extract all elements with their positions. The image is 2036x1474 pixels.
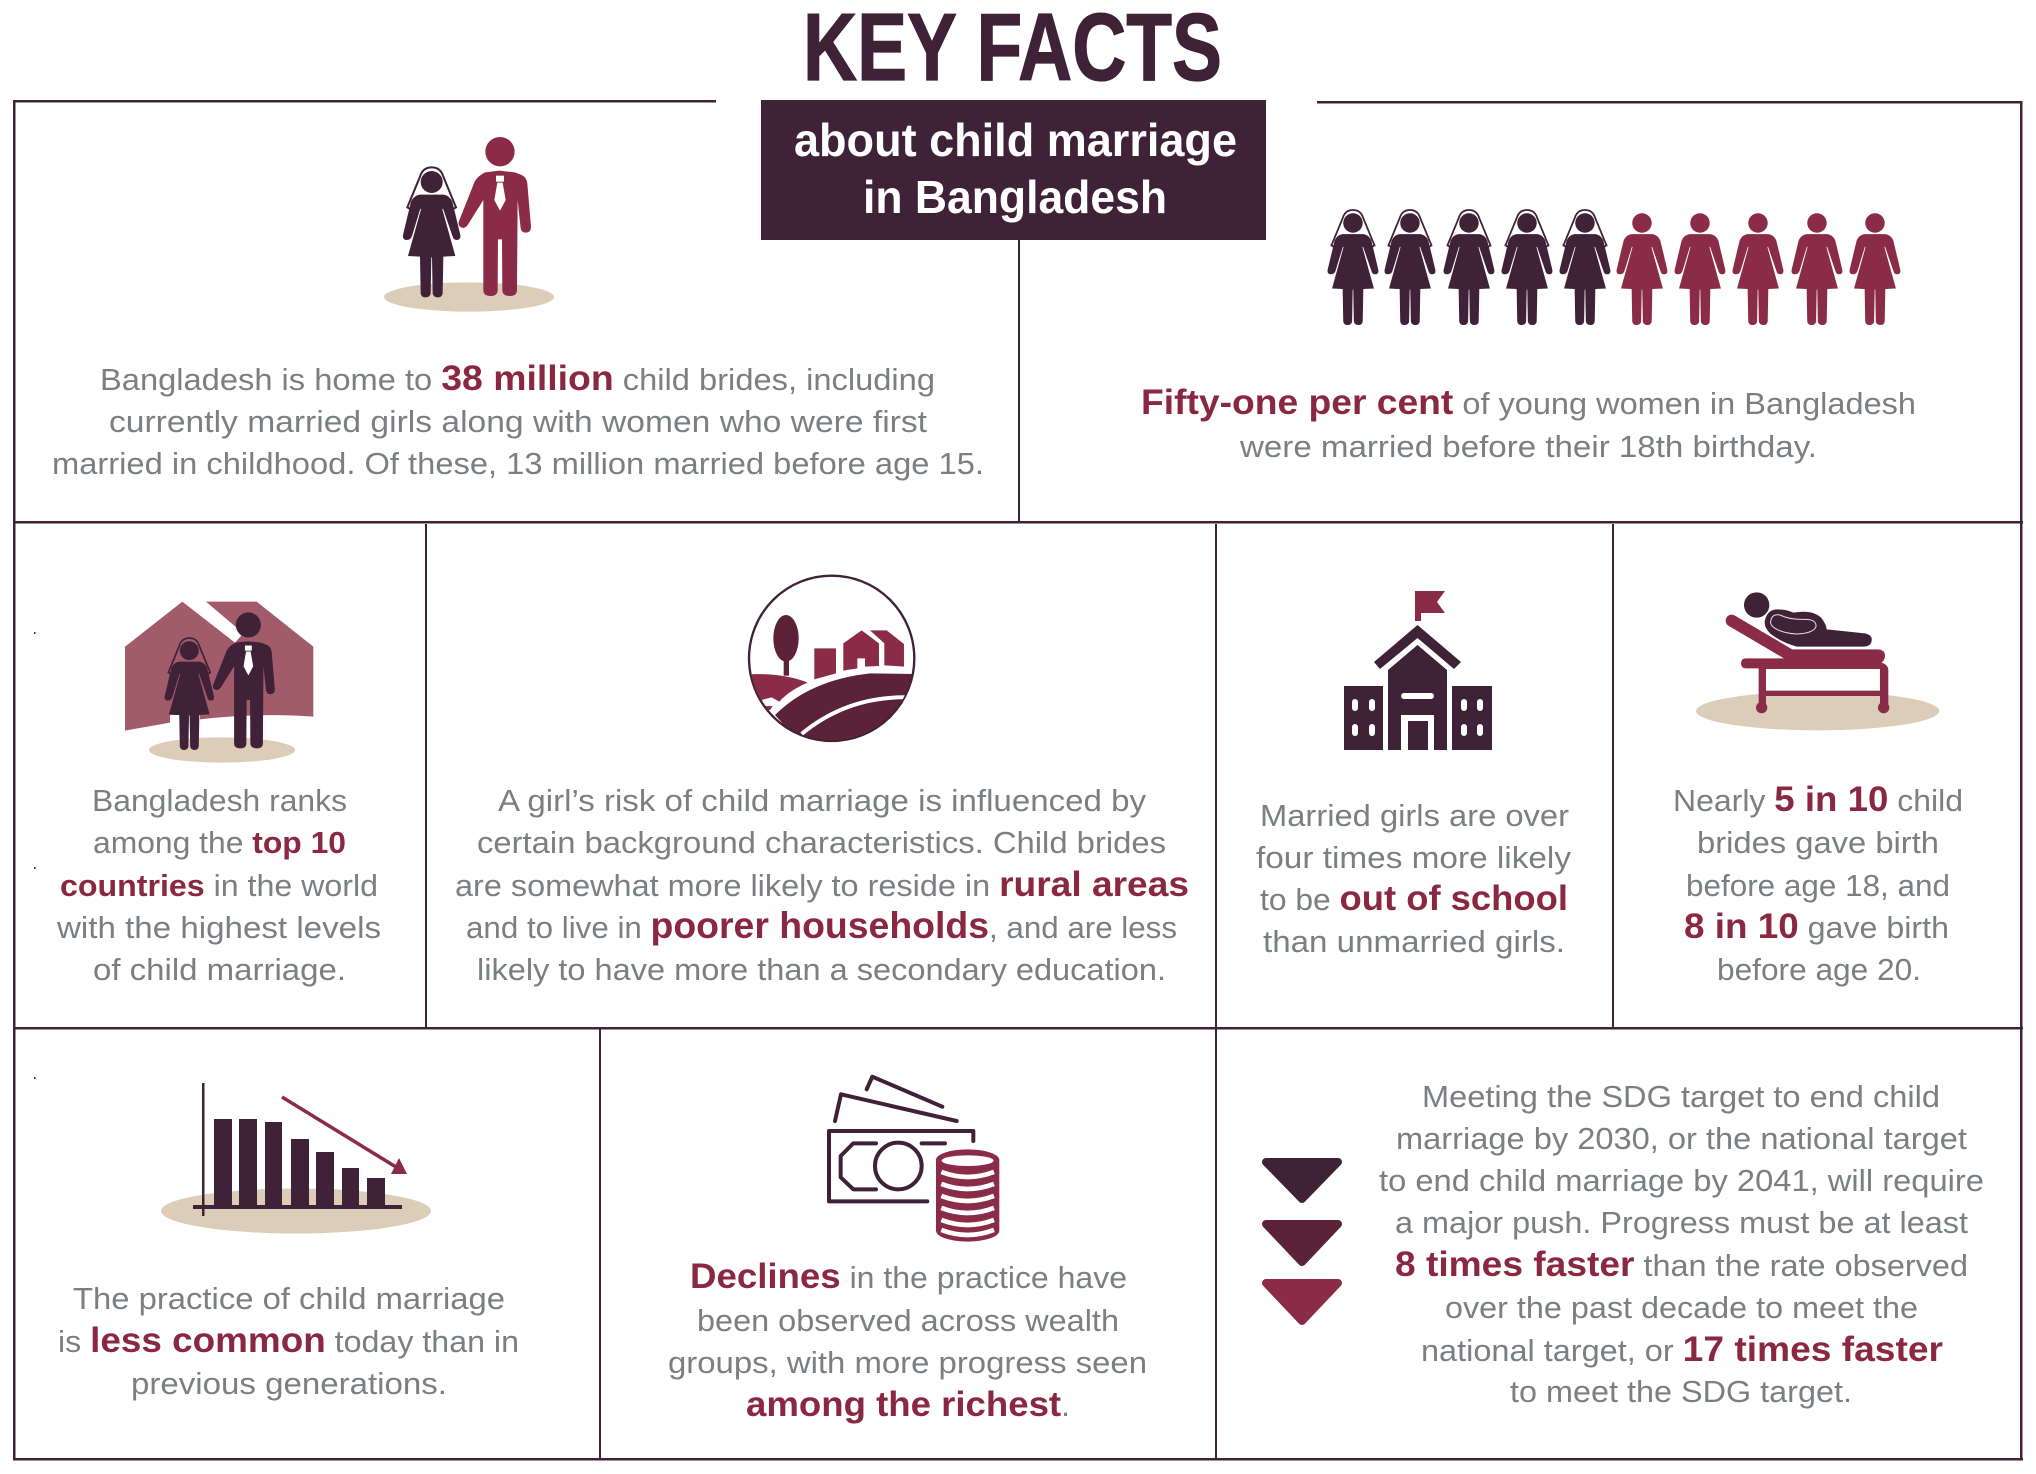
- text: top 10 countries: Bangladesh ranks: [92, 783, 347, 818]
- text: SDG target: national target, or 17 times faster: [1421, 1329, 1943, 1369]
- panel: declines across wealth groups: [599, 1028, 1215, 1459]
- text: less common: The practice of child marriage: [73, 1281, 505, 1316]
- text: SDG target: 8 times faster than the rate observed: [1395, 1244, 1968, 1284]
- text: background characteristics: and to live in poorer households, and are less: [466, 905, 1177, 946]
- text: 38 million: currently married girls along with women who were first: [109, 404, 927, 439]
- text: 38 million: Bangladesh is home to 38 million child brides, including: [100, 358, 935, 398]
- text: gave birth: 8 in 10 gave birth: [1684, 906, 1949, 946]
- panel: out of school: [1215, 522, 1612, 1028]
- text: SDG target: a major push. Progress must be at least: [1395, 1205, 1968, 1240]
- text: top 10 countries: among the top 10: [93, 825, 346, 860]
- text: fifty-one per cent: Fifty-one per cent of young women in Bangladesh: [1141, 382, 1916, 422]
- text: fifty-one per cent: [1141, 382, 1916, 464]
- icon: bride and groom on ground: [384, 137, 554, 312]
- panel: background characteristics: [456, 574, 1188, 986]
- text: declines: among the richest .: [746, 1384, 1070, 1424]
- icon: row of ten female figures: [1328, 210, 1900, 325]
- text: gave birth: before age 18, and: [1686, 868, 1950, 903]
- text: declines: [668, 1256, 1147, 1424]
- text: SDG target: [1379, 1079, 1984, 1409]
- text: top 10 countries: with the highest levels: [56, 910, 381, 945]
- panel: fifty-one per cent: [1018, 102, 2022, 522]
- panel: gave birth: [1612, 522, 2022, 1028]
- panel: SDG target: [1215, 1028, 2022, 1459]
- text: gave birth: [1673, 779, 1963, 987]
- text: background characteristics: certain background characteristics. Child brides: [477, 825, 1166, 860]
- text: SDG target: marriage by 2030, or the national target: [1396, 1121, 1967, 1156]
- text: less common: [58, 1281, 519, 1401]
- text: background characteristics: are somewhat more likely to reside in rural areas: [455, 864, 1189, 904]
- text: out of school: to be out of school: [1260, 878, 1568, 918]
- text: out of school: Married girls are over: [1260, 798, 1569, 833]
- icon: banknotes and coins: [829, 1077, 999, 1242]
- icon: woman lying on bed: [1696, 592, 1939, 730]
- subtitle banner: [761, 100, 1266, 240]
- subtitle banner: about child marriage: [794, 114, 1237, 166]
- icon: couple in front of house: [125, 602, 313, 763]
- subtitle banner: in Bangladesh: [863, 171, 1167, 223]
- text: background characteristics: [455, 783, 1189, 987]
- text: declines: been observed across wealth: [697, 1303, 1119, 1338]
- panel: less common: [14, 1028, 599, 1459]
- text: gave birth: Nearly 5 in 10 child: [1673, 779, 1963, 819]
- text: background characteristics: A girl’s risk of child marriage is influenced by: [498, 783, 1147, 818]
- text: declines: Declines in the practice have: [690, 1256, 1127, 1296]
- text: declines: groups, with more progress seen: [668, 1345, 1147, 1380]
- text: gave birth: before age 20.: [1717, 952, 1921, 987]
- text: SDG target: to meet the SDG target.: [1510, 1374, 1852, 1409]
- text: fifty-one per cent: were married before their 18th birthday.: [1239, 429, 1817, 464]
- text: SDG target: Meeting the SDG target to end child: [1422, 1079, 1940, 1114]
- text: top 10 countries: of child marriage.: [93, 952, 346, 987]
- text: out of school: four times more likely: [1256, 840, 1572, 875]
- text: out of school: than unmarried girls.: [1263, 924, 1565, 959]
- text: background characteristics: likely to have more than a secondary education.: [477, 952, 1166, 987]
- text: less common: is less common today than in: [58, 1320, 519, 1360]
- text: top 10 countries: [56, 783, 381, 987]
- icon: rural landscape circle: [747, 576, 917, 747]
- icon: three downward triangles: [1266, 1162, 1338, 1321]
- panel: 38 million child brides: [14, 101, 1018, 522]
- text: gave birth: brides gave birth: [1697, 825, 1939, 860]
- text: 38 million: [52, 358, 984, 481]
- text: out of school: [1256, 798, 1572, 959]
- icon: school building with flag: [1344, 591, 1492, 750]
- text: less common: previous generations.: [131, 1366, 447, 1401]
- icon: declining bar chart: [161, 1083, 431, 1234]
- text: 38 million: married in childhood. Of these, 13 million married before age 15.: [52, 446, 984, 481]
- text: top 10 countries: countries in the world: [60, 868, 378, 903]
- text: SDG target: over the past decade to meet the: [1445, 1290, 1918, 1325]
- text: SDG target: to end child marriage by 2041, will require: [1379, 1163, 1984, 1198]
- panel: top 10 countries: [14, 522, 426, 1028]
